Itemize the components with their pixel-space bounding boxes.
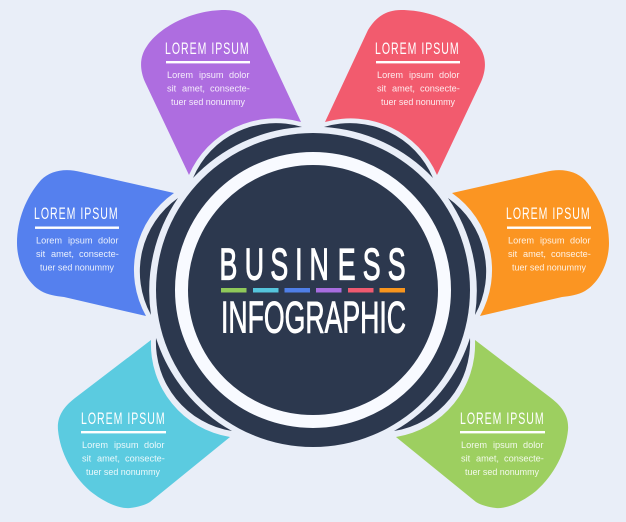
- panel: red: amet,: [392, 84, 415, 94]
- dark crescents around the hub: [140, 123, 486, 431]
- panel: red: tuer sed nonummy: [381, 97, 455, 107]
- panel: orange: amet,: [523, 249, 546, 259]
- panel: orange: ipsum: [540, 236, 565, 246]
- panel: orange: LOREM IPSUM: [506, 203, 590, 223]
- panel: purple: consecte-: [210, 84, 250, 94]
- panel: purple: sit: [167, 84, 177, 94]
- panel: blue: [17, 170, 174, 316]
- color key bars: [221, 288, 405, 292]
- panel: teal: [58, 340, 230, 508]
- panel: blue: dolor: [98, 236, 118, 246]
- panel: teal: sit: [82, 454, 92, 464]
- panel: blue: sit: [36, 249, 46, 259]
- panel: purple: ipsum: [199, 70, 224, 80]
- panel: purple: tuer sed nonummy: [171, 97, 245, 107]
- panel: blue: amet,: [51, 249, 74, 259]
- panel: red: [325, 10, 485, 175]
- panel: green: [396, 340, 568, 508]
- panel: purple: LOREM IPSUM: [165, 38, 249, 58]
- panel: green: dolor: [523, 440, 543, 450]
- panel: orange: tuer sed nonummy: [512, 262, 586, 272]
- panel: blue: consecte-: [79, 249, 119, 259]
- panel: orange: Lorem: [508, 236, 534, 246]
- panel: blue: Lorem: [36, 236, 62, 246]
- panel: orange: dolor: [570, 236, 590, 246]
- panel: red: sit: [377, 84, 387, 94]
- panel: green: tuer sed nonummy: [465, 467, 539, 477]
- title: business: BUSINESS: [220, 240, 406, 289]
- panel: orange: consecte-: [551, 249, 591, 259]
- panel: purple: Lorem: [167, 70, 193, 80]
- panel: teal: dolor: [144, 440, 164, 450]
- panel: green: LOREM IPSUM: [460, 408, 544, 428]
- panel: teal: tuer sed nonummy: [86, 467, 160, 477]
- panel: red: LOREM IPSUM: [375, 38, 459, 58]
- panel: teal: Lorem: [82, 440, 108, 450]
- title: infographic: INFOGRAPHIC: [221, 294, 406, 342]
- panel: orange: [452, 170, 609, 316]
- panel: red: dolor: [439, 70, 459, 80]
- panel: green: Lorem: [461, 440, 487, 450]
- panel: blue: tuer sed nonummy: [40, 262, 114, 272]
- panel: teal: ipsum: [114, 440, 139, 450]
- panel: blue: LOREM IPSUM: [34, 203, 118, 223]
- panel: purple: [141, 10, 301, 175]
- panel: green: amet,: [476, 454, 499, 464]
- panel: green: consecte-: [504, 454, 544, 464]
- central hub circle: [156, 133, 470, 447]
- panel: green: ipsum: [493, 440, 518, 450]
- panel: blue: ipsum: [68, 236, 93, 246]
- panel: teal: LOREM IPSUM: [81, 408, 165, 428]
- panel: purple: amet,: [182, 84, 205, 94]
- panel: green: sit: [461, 454, 471, 464]
- panel: teal: consecte-: [125, 454, 165, 464]
- panel: red: Lorem: [377, 70, 403, 80]
- panel: purple: dolor: [229, 70, 249, 80]
- panel: red: consecte-: [420, 84, 460, 94]
- panel: orange: sit: [508, 249, 518, 259]
- panel: red: ipsum: [409, 70, 434, 80]
- panel: teal: amet,: [97, 454, 120, 464]
